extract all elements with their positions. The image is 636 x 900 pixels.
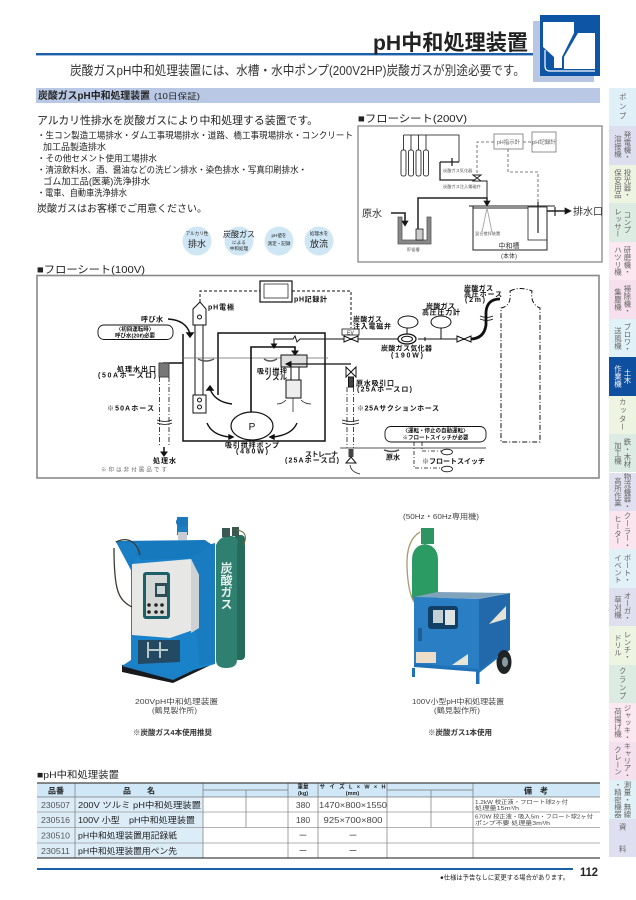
side index tabs: レッサー xyxy=(614,208,622,237)
hose xyxy=(114,540,140,607)
pH instruments: pH指示計 xyxy=(497,138,521,146)
page number: 112 xyxy=(580,867,598,879)
control panel xyxy=(143,572,170,619)
panel: flow sheet 100V xyxy=(37,276,599,478)
diagram labels xyxy=(98,284,502,474)
side index tabs: 集塵機 xyxy=(614,288,622,311)
application list: ・その他セメント使用工場排水 xyxy=(37,152,157,164)
subtitle: 炭酸ガスpH中和処理装置には、水槽・水中ポンプ(200V2HP)炭酸ガスが別途必要です。 xyxy=(70,63,525,78)
row 230507: 200V ツルミ pH中和処理装置 xyxy=(78,800,202,810)
pH instruments xyxy=(477,132,556,202)
bubble: CO2 treatment: 中和処理 xyxy=(230,245,249,252)
diagram labels: pH電極 xyxy=(208,302,234,312)
diagram labels: ※25Aサクションホース xyxy=(357,404,439,412)
photo: 200V neutralizer unit xyxy=(114,517,245,683)
application list: ゴム加工品(医薬)洗浄排水 xyxy=(43,176,150,186)
unit top xyxy=(414,592,509,599)
title: pH中和処理装置 xyxy=(373,31,528,55)
diagram labels: ノズル xyxy=(265,372,287,382)
side index tabs: 発電機・ xyxy=(623,131,632,160)
table header: 重量 xyxy=(297,782,309,790)
labels: 排水口 xyxy=(573,205,603,218)
diagram labels: pH記録計 xyxy=(294,294,327,304)
pump xyxy=(231,347,298,440)
table grid xyxy=(37,783,600,858)
caption: 100V unit: 100V小型pH中和処理装置 xyxy=(412,696,505,706)
row 230510: ー xyxy=(349,830,357,840)
icon: neutralizer tank xyxy=(533,15,600,82)
side index tabs: 溶接機 xyxy=(614,135,622,157)
base xyxy=(122,655,215,683)
side index tabs: カッター xyxy=(618,398,627,432)
gas vaporizer xyxy=(440,158,475,180)
caption: 100V unit: (鶴見製作所) xyxy=(434,705,481,715)
row 230516 xyxy=(41,812,594,827)
side index tabs: クレーン xyxy=(614,746,622,776)
table header: 備 考 xyxy=(524,786,548,796)
diagram labels: 処理水出口 xyxy=(117,364,156,374)
lower piping xyxy=(138,640,180,664)
flow arrows xyxy=(168,319,297,439)
diagram labels: 〈初回運転時〉 xyxy=(116,325,154,333)
footer rule xyxy=(37,868,573,870)
row 230511: ー xyxy=(299,846,307,856)
labels: 炭酸ガス注入電磁弁 xyxy=(443,183,481,190)
row 230511 xyxy=(41,846,357,856)
pump: P xyxy=(249,422,256,433)
diagram labels: (50Aホースロ) xyxy=(98,372,156,380)
row 230507: 1.2kW 校正液・フロート球2ヶ付 xyxy=(475,798,569,806)
gas line xyxy=(272,299,500,348)
table header: 品 名 xyxy=(123,786,155,796)
diagram labels: ※フロートスイッチ xyxy=(422,458,485,466)
side index tabs: ブロワ・ xyxy=(623,323,632,353)
side index tabs: 高所作業 xyxy=(614,477,622,507)
heading: flow sheet 200V: ■フローシート(200V) xyxy=(358,113,467,125)
side index tabs: レンチ・ xyxy=(623,631,632,660)
row 230507: 処理量15m³/h xyxy=(475,804,519,812)
wheel and legs xyxy=(412,650,512,684)
spec table xyxy=(37,782,600,858)
row 230516: ポンプ不要 処理量3m³/h xyxy=(475,819,550,827)
diagram labels: 吸引撹拌ポンプ xyxy=(225,440,279,450)
side index tabs: 資 料 xyxy=(618,823,627,853)
bubble: alkaline wastewater: 排水 xyxy=(188,238,206,249)
row 230516: 180 xyxy=(296,815,310,825)
diagram labels: (25Aホースロ) xyxy=(285,456,339,464)
bubble: discharge: 処理水を xyxy=(310,230,329,237)
table header: (kg) xyxy=(298,791,308,797)
section bar: (10日保証) xyxy=(154,91,200,101)
side index tabs: 送風機 xyxy=(614,327,622,349)
pH instruments: pH記録計 xyxy=(532,138,556,146)
transfer pipe xyxy=(418,198,487,232)
diagram labels: ※フロートスイッチが必要 xyxy=(402,434,469,442)
diagram labels: ※50Aホース xyxy=(107,404,154,412)
row 230511: ー xyxy=(349,846,357,856)
gas cylinder xyxy=(407,528,438,602)
side index tabs: ジャッキ・ xyxy=(623,704,632,741)
diagram labels: 吸引撹拌 xyxy=(257,366,287,376)
diagram labels: 炭酸ガス xyxy=(464,284,493,292)
blue frame xyxy=(116,541,215,676)
table header: サイズL×W×H xyxy=(320,782,386,790)
labels: 原水 xyxy=(362,208,382,220)
control panel xyxy=(428,606,458,629)
labels: 中和槽 xyxy=(498,241,520,250)
diagram labels: 高圧圧力計 xyxy=(422,308,460,316)
bubble: CO2 treatment: による xyxy=(232,240,246,246)
section bar: 炭酸ガスpH中和処理装置 xyxy=(38,89,150,102)
side index tabs: 保安用品 xyxy=(614,169,622,199)
row 230507: 230507 xyxy=(41,800,70,810)
priming callout xyxy=(98,325,173,340)
bubble: pH record: 測定・記録 xyxy=(268,240,291,247)
diagram labels: 炭酸ガス xyxy=(426,302,455,310)
table header: (mm) xyxy=(346,791,359,797)
diagram labels: 炭酸ガス気化器 xyxy=(381,344,432,352)
white cabinet xyxy=(132,559,199,638)
unit body xyxy=(414,597,479,670)
side index tabs: ハツリ機 xyxy=(614,246,622,276)
note: frequency: (50Hz・60Hz専用機) xyxy=(403,511,480,521)
row 230507: 1470×800×1550 xyxy=(319,800,387,810)
diagram labels: 呼び水 xyxy=(141,314,163,324)
labels: (本体) xyxy=(501,252,517,260)
suction nozzle xyxy=(277,355,311,412)
side index tabs: ポンプ xyxy=(618,93,627,121)
application list xyxy=(37,130,353,198)
table backgrounds xyxy=(37,783,600,858)
row 230516: 670W 校正液・吸入5m・フロート球2ヶ付 xyxy=(475,812,594,820)
side index tabs: ボート・ xyxy=(623,554,632,583)
treatment tank xyxy=(183,333,325,441)
table heading: ■pH中和処理装置 xyxy=(37,769,120,781)
row 230510: ー xyxy=(299,830,307,840)
row 230507: 380 xyxy=(296,800,310,810)
caption: 100V unit xyxy=(412,696,505,737)
diagram labels: (25Aホースロ) xyxy=(357,386,412,394)
recorder and signal line xyxy=(200,281,351,328)
application list: ・生コン製造工場排水・ダム工事現場排水・道路、橋工事現場排水・コンクリート xyxy=(37,130,353,140)
section bar xyxy=(36,88,600,103)
side index tabs xyxy=(609,88,636,857)
float switches xyxy=(385,426,486,472)
row 230510 xyxy=(41,830,357,840)
row 230510: pH中和処理装置用記録紙 xyxy=(78,830,178,840)
side index tabs: 研磨機・ xyxy=(623,246,632,276)
diagram labels: (190W) xyxy=(391,352,423,360)
side index tabs: 草刈機 xyxy=(614,596,622,618)
labels: 炭酸ガス気化器 xyxy=(443,167,473,174)
diagram labels: 処理水 xyxy=(153,456,176,465)
diagram labels: 〈運転・停止の自動運転〉 xyxy=(402,426,469,434)
side index tabs: 測量・無線 xyxy=(623,781,632,818)
top plate xyxy=(115,540,212,560)
side index tabs: オーガ・ xyxy=(623,592,632,622)
row 230511: pH中和処理装置用ペン先 xyxy=(78,846,178,856)
diagram labels: 高圧ホース xyxy=(464,290,502,298)
diagram labels: 炭酸ガス xyxy=(353,314,382,324)
side index tabs: クーラー・ xyxy=(623,512,632,549)
diagram labels: 原水 xyxy=(386,452,400,462)
intro heading: アルカリ性排水を炭酸ガスにより中和処理する装置です。 xyxy=(37,113,318,127)
side index tabs: ドリル xyxy=(614,634,622,657)
side index tabs: キャリア・ xyxy=(623,742,632,779)
diagram labels: 原水吸引口 xyxy=(356,378,394,388)
bubble: discharge: 放流 xyxy=(310,238,328,249)
labels xyxy=(362,167,603,260)
gas cylinders xyxy=(216,527,245,668)
caption: 200V unit: 200VpH中和処理装置 xyxy=(135,696,219,706)
side index tabs: 加工機 xyxy=(614,442,622,464)
side index tabs: 物流機器・ xyxy=(623,473,632,510)
bubble: CO2 treatment xyxy=(223,226,255,256)
caption: 100V unit: ※炭酸ガス1本使用 xyxy=(428,727,492,737)
bubble: pH record xyxy=(264,226,294,256)
diagram labels: ※印は非付属品です xyxy=(101,466,167,474)
bubble: discharge xyxy=(304,226,334,256)
row 230511: 230511 xyxy=(41,846,70,856)
side index tabs: クランプ xyxy=(618,667,627,701)
bubble: alkaline wastewater xyxy=(182,226,212,256)
raw water intake xyxy=(286,362,486,474)
header rule xyxy=(36,53,536,55)
gas cylinders xyxy=(401,135,459,176)
row 230507 xyxy=(41,798,569,812)
warning labels xyxy=(416,652,436,663)
gas note: 炭酸ガスはお客様でご用意ください。 xyxy=(37,202,207,215)
row 230516: 230516 xyxy=(41,815,70,825)
pH electrode xyxy=(193,302,206,413)
caption: 200V unit: ※炭酸ガス4本使用推奨 xyxy=(133,727,212,737)
gas cylinders: 炭酸ガス xyxy=(219,561,233,610)
row 230516: 100V 小型 pH中和処理装置 xyxy=(78,815,196,825)
outlet hose xyxy=(157,363,183,456)
discharge arrow xyxy=(547,210,566,212)
bubble: alkaline wastewater: アルカリ性 xyxy=(186,230,209,237)
application list: ・電車、自動車洗浄排水 xyxy=(37,187,127,198)
side index tabs: コンプ xyxy=(623,211,632,234)
labels: 貯留槽 xyxy=(407,246,420,253)
caption: 200V unit: (鶴見製作所) xyxy=(152,705,198,715)
side index tabs: 鉄・木材 xyxy=(623,438,632,468)
process bubbles xyxy=(182,226,334,256)
raw water pit xyxy=(398,217,431,244)
diagram labels: 呼び水(20ℓ)必要 xyxy=(115,332,155,340)
neutralizing tank xyxy=(469,206,555,250)
gas cylinder outline xyxy=(501,288,540,442)
diagram labels: ストレーナ xyxy=(305,450,338,458)
diagram labels: 注入電磁弁 xyxy=(353,322,391,330)
side index tabs: 掃除機・ xyxy=(623,285,632,314)
panel: flow sheet 200V xyxy=(358,126,603,262)
row 230516: 925×700×800 xyxy=(324,815,383,825)
footer note: ●仕様は予告なしに変更する場合があります。 xyxy=(440,872,569,882)
side index tabs: ・精密機器 xyxy=(614,781,622,818)
side index tabs: 投光器・ xyxy=(623,169,632,199)
photo: 100V small neutralizer unit xyxy=(407,528,512,684)
side index tabs: ヒーター xyxy=(614,515,622,545)
application list: ・清涼飲料水、酒、醤油などの洗ビン排水・染色排水・写真印刷排水・ xyxy=(37,164,307,175)
bubble: CO2 treatment: 炭酸ガス xyxy=(223,229,255,239)
table header: 品番 xyxy=(48,786,64,796)
application list: 加工品製造排水 xyxy=(43,141,106,152)
bubble: pH record: pH値を xyxy=(271,232,287,239)
labels: 混合撹拌装置 xyxy=(475,230,500,237)
diagram labels: (2m) xyxy=(465,297,485,304)
side index tabs: 作業機 xyxy=(614,365,622,387)
side index tabs: イベント xyxy=(614,554,622,583)
table header xyxy=(48,782,548,797)
heading: flow sheet 100V: ■フローシート(100V) xyxy=(37,264,145,276)
side index tabs: 土木 xyxy=(623,369,632,384)
blue flange xyxy=(176,517,188,540)
side index tabs: 荷揚げ機 xyxy=(614,708,622,737)
caption: 200V unit xyxy=(133,696,219,737)
gas line: EV xyxy=(347,330,354,336)
solenoid valve xyxy=(473,175,487,205)
row 230510: 230510 xyxy=(41,830,70,840)
diagram labels: (480W) xyxy=(236,448,268,456)
